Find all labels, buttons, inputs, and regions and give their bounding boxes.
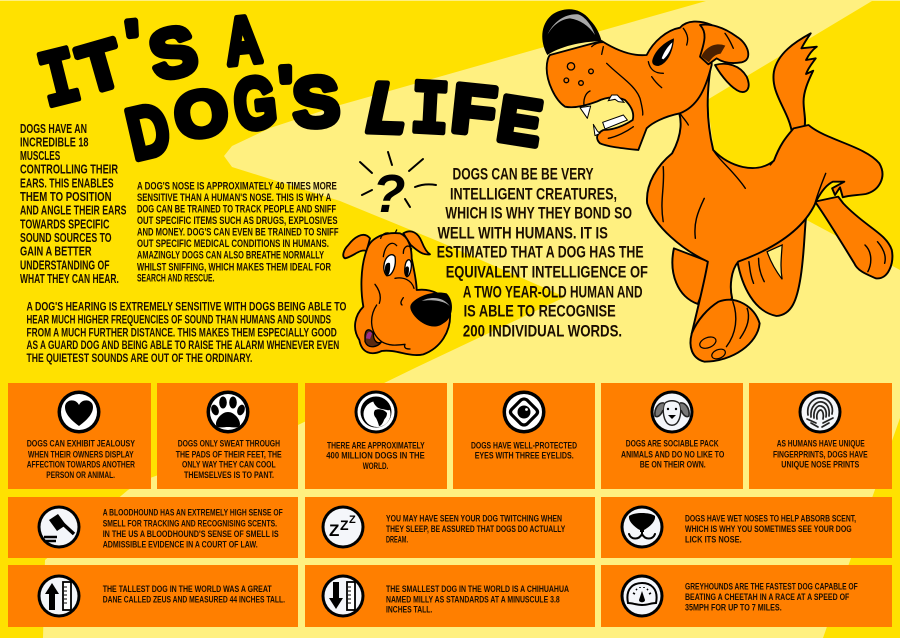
dog rear and body	[647, 33, 892, 362]
face lines	[584, 28, 688, 138]
panel: population	[305, 383, 447, 489]
text: dog's nose: SEARCH AND RESCUE.	[137, 273, 214, 285]
panel: jealousy: DOGS CAN EXHIBIT JEALOUSY	[27, 438, 136, 449]
text: dog intelligence: A TWO YEAR-OLD HUMAN AND	[463, 283, 643, 301]
icon: sleeping zzz	[322, 506, 364, 548]
title line 1: '	[123, 8, 143, 75]
middle leg	[737, 217, 806, 316]
text: dog's nose: DOG CAN BE TRAINED TO TRACK PEOPLE AND SNIFF	[137, 203, 336, 215]
title line 2: S	[291, 62, 341, 142]
panel: jealousy: PERSON OR ANIMAL.	[46, 469, 115, 480]
panel: eyelids: DOGS HAVE WELL-PROTECTED	[471, 439, 577, 450]
illustration: small dog head	[343, 230, 452, 355]
far front leg left	[672, 248, 713, 304]
panel: smallest dog: INCHES TALL.	[386, 604, 432, 615]
panel: greyhounds: BEATING A CHEETAH IN A RACE AT A SPEED OF	[685, 591, 849, 602]
text: dog's hearing: A DOG'S HEARING IS EXTREMELY SENSITIVE WITH DOGS BEING ABLE TO	[26, 299, 346, 313]
freckles	[564, 63, 593, 85]
title line 1	[31, 2, 264, 130]
tail	[773, 33, 817, 132]
text: dog intelligence: ESTIMATED THAT A DOG HAS THE	[437, 244, 644, 262]
panel: jealousy	[8, 383, 151, 489]
icon: dog face	[650, 390, 694, 434]
panel: pack animals	[601, 383, 743, 489]
skull and jaws	[547, 22, 712, 150]
illustration: big orange dog	[542, 9, 892, 362]
panel: population: WORLD.	[363, 460, 388, 471]
text: dog's nose: OUT SPECIFIC ITEMS SUCH AS DRUGS, EXPLOSIVES	[137, 215, 338, 227]
text: dog's nose	[137, 180, 339, 285]
text: ear muscles: WHAT THEY CAN HEAR.	[20, 272, 119, 286]
panel: wet noses	[601, 497, 892, 558]
text: ear muscles: THEM TO POSITION	[20, 190, 112, 204]
text: ear muscles: EARS. THIS ENABLES	[20, 176, 114, 190]
panel: nose prints: AS HUMANS HAVE UNIQUE	[777, 438, 865, 449]
text: ear muscles: AND ANGLE THEIR EARS	[20, 204, 126, 218]
title line 1: A	[222, 2, 264, 79]
eye	[652, 38, 674, 66]
text: ear muscles: GAIN A BETTER	[20, 245, 92, 259]
text: dog intelligence: WELL WITH HUMANS. IT IS	[438, 224, 608, 242]
text: dog intelligence: WHICH IS WHY THEY BOND SO	[445, 205, 632, 223]
nose	[410, 292, 452, 326]
background: right yellow field	[707, 1, 900, 270]
panel: tallest dog: DANE CALLED ZEUS AND MEASURED 44 INCHES TALL.	[103, 593, 285, 604]
panel: dreaming: YOU MAY HAVE SEEN YOUR DOG TWITCHING WHEN	[386, 512, 562, 523]
panel: jealousy: AFFECTION TOWARDS ANOTHER	[27, 459, 135, 470]
panel: tallest dog	[8, 565, 298, 627]
icon: paw print	[206, 390, 250, 434]
title line 2: D	[120, 88, 177, 175]
panel: sweat: DOGS ONLY SWEAT THROUGH	[178, 438, 280, 449]
text: dog intelligence: INTELLIGENT CREATURES,	[450, 185, 617, 203]
icon: question mark with rays	[360, 152, 436, 224]
text: ear muscles: MUSCLES	[20, 149, 60, 163]
title line 2: I	[408, 69, 451, 157]
dog head	[542, 9, 749, 150]
text: ear muscles: UNDERSTANDING OF	[20, 258, 110, 272]
text: dog's nose: AND MONEY. DOG'S CAN EVEN BE TRAINED TO SNIFF	[137, 226, 339, 238]
left ear	[343, 235, 370, 258]
near ear	[700, 25, 748, 64]
icon: heart	[58, 390, 100, 434]
title line 2: L	[360, 69, 415, 148]
title line 2: G	[230, 62, 280, 146]
text: dog's nose: AMAZINGLY DOGS CAN ALSO BREATHE NORMALLY	[137, 250, 324, 262]
panel: population: THERE ARE APPROXIMATELY	[327, 439, 425, 450]
fangs	[580, 106, 600, 136]
icon: gavel	[38, 506, 80, 548]
panel: sweat: THEMSELVES IS TO PANT.	[184, 469, 274, 480]
text: dog intelligence: DOGS CAN BE BE VERY	[452, 166, 594, 184]
icon: sleeping zzz: Z	[329, 521, 339, 540]
panel: pack animals: BE ON THEIR OWN.	[640, 459, 706, 470]
panel: nose prints: FINGERPRINTS, DOGS HAVE	[773, 448, 868, 459]
panel: bloodhound: IN THE US A BLOODHOUND'S SENSE OF SMELL IS	[103, 528, 279, 539]
title line 2: F	[448, 69, 500, 150]
icon: down arrow and ruler	[322, 574, 364, 618]
panel: nose prints	[749, 383, 892, 489]
panel: bloodhound	[8, 497, 298, 558]
panel: smallest dog: NAMED MILLY AS STANDARDS AT A MINUSCULE 3.8	[386, 593, 560, 604]
text: dog intelligence: EQUIVALENT INTELLIGENCE OF	[446, 264, 648, 282]
panel: greyhounds	[601, 565, 892, 627]
title line 1: I	[31, 33, 90, 130]
panel: bloodhound: SMELL FOR TRACKING AND RECOGNISING SCENTS.	[103, 517, 277, 528]
icon: eye	[502, 390, 546, 434]
text: dog's nose: WHILST SNIFFING, WHICH MAKES THEM IDEAL FOR	[137, 261, 331, 273]
eyes	[384, 255, 395, 276]
panel: nose prints: UNIQUE NOSE PRINTS	[781, 459, 859, 470]
body contour lines	[662, 150, 826, 238]
right ear	[403, 231, 430, 254]
panel: tallest dog: THE TALLEST DOG IN THE WORLD WAS A GREAT	[103, 583, 272, 594]
text: dog's hearing: FROM A MUCH FURTHER DISTANCE. THIS MAKES THEM ESPECIALLY GOOD	[26, 325, 337, 339]
text: dog's nose: A DOG'S NOSE IS APPROXIMATELY 40 TIMES MORE	[137, 180, 337, 192]
icon: dog muzzle	[620, 506, 664, 548]
icon: speedometer	[620, 574, 664, 618]
title line 2: E	[493, 82, 547, 160]
title line 2: O	[169, 75, 233, 154]
panel: bloodhound: ADMISSIBLE EVIDENCE IN A COURT OF LAW.	[103, 538, 258, 549]
text: dog's nose: SENSITIVE THAN A HUMAN'S NOSE. THIS IS WHY A	[137, 192, 331, 204]
body and neck	[647, 57, 882, 333]
icon: fingerprint	[798, 390, 842, 434]
text: dog's hearing	[26, 299, 346, 365]
text: dog intelligence: 200 INDIVIDUAL WORDS.	[463, 322, 622, 340]
panel: pack animals: DOGS ARE SOCIABLE PACK	[626, 438, 719, 449]
text: dog's hearing: THE QUIETEST SOUNDS ARE OUT OF THE ORDINARY.	[26, 351, 252, 365]
text: dog's nose: OUT SPECIFIC MEDICAL CONDITIONS IN HUMANS.	[137, 238, 329, 250]
panel: dreaming: THEY SLEEP, BE ASSURED THAT DOGS DO ACTUALLY	[386, 523, 566, 534]
title line 2	[120, 55, 547, 175]
text: ear muscles: SOUND SOURCES TO	[20, 231, 112, 245]
tongue	[366, 332, 372, 339]
far rear leg	[815, 197, 892, 278]
panel: dreaming: DREAM.	[386, 533, 408, 544]
text: ear muscles: DOGS HAVE AN	[20, 122, 87, 136]
panel: eyelids	[453, 383, 595, 489]
panel: greyhounds: 35MPH FOR UP TO 7 MILES.	[685, 601, 782, 612]
title line 1: S	[143, 11, 203, 95]
panel: dreaming	[305, 497, 595, 558]
face lines	[372, 230, 414, 349]
title	[31, 2, 547, 175]
icon: question mark with rays: ?	[372, 164, 406, 224]
text: ear muscles: TOWARDS SPECIFIC	[20, 217, 110, 231]
icon: up arrow and ruler	[38, 574, 80, 618]
panel: jealousy: WHEN THEIR OWNERS DISPLAY	[28, 448, 134, 459]
big nose	[542, 9, 602, 55]
text: dog's hearing: HEAR MUCH HIGHER FREQUENCIES OF SOUND THAN HUMANS AND SOUNDS	[26, 312, 331, 326]
title line 1: T	[71, 25, 130, 107]
text: ear muscles: CONTROLLING THEIR	[20, 163, 118, 177]
panel: eyelids: EYES WITH THREE EYELIDS.	[475, 450, 574, 461]
panel: pack animals: ANIMALS AND DO NO LIKE TO	[621, 448, 724, 459]
text: dog intelligence: IS ABLE TO RECOGNISE	[464, 303, 616, 321]
head	[355, 233, 450, 355]
panel: population: 400 MILLION DOGS IN THE	[326, 450, 425, 461]
icon: globe	[354, 390, 398, 434]
icon: sleeping zzz: Z	[349, 514, 356, 526]
gap in middle leg	[767, 245, 782, 279]
background: lower right yellow corner	[823, 418, 900, 638]
mouth	[365, 330, 382, 347]
text: ear muscles: INCREDIBLE 18	[20, 135, 89, 149]
text: ear muscles	[20, 122, 126, 286]
far ear	[715, 64, 749, 92]
panel: smallest dog	[305, 565, 595, 627]
panel: wet noses: LICK ITS NOSE.	[685, 533, 742, 544]
upper teeth	[608, 95, 624, 102]
main foot	[690, 300, 760, 362]
panel: sweat	[157, 383, 298, 489]
background: left yellow field	[0, 1, 706, 638]
text: dog intelligence	[437, 166, 648, 340]
lower teeth	[603, 115, 627, 129]
panel: sweat: THE PADS OF THEIR FEET, THE	[176, 448, 282, 459]
panel: smallest dog: THE SMALLEST DOG IN THE WORLD IS A CHIHUAHUA	[386, 583, 569, 594]
panel: bloodhound: A BLOODHOUND HAS AN EXTREMELY HIGH SENSE OF	[103, 507, 283, 518]
panel: sweat: ONLY WAY THEY CAN COOL	[182, 459, 276, 470]
icon: sleeping zzz: Z	[340, 517, 349, 533]
title line 2: '	[277, 55, 295, 120]
text: dog's hearing: AS A GUARD DOG AND BEING ABLE TO RAISE THE ALARM WHENEVER EVEN	[26, 338, 339, 352]
